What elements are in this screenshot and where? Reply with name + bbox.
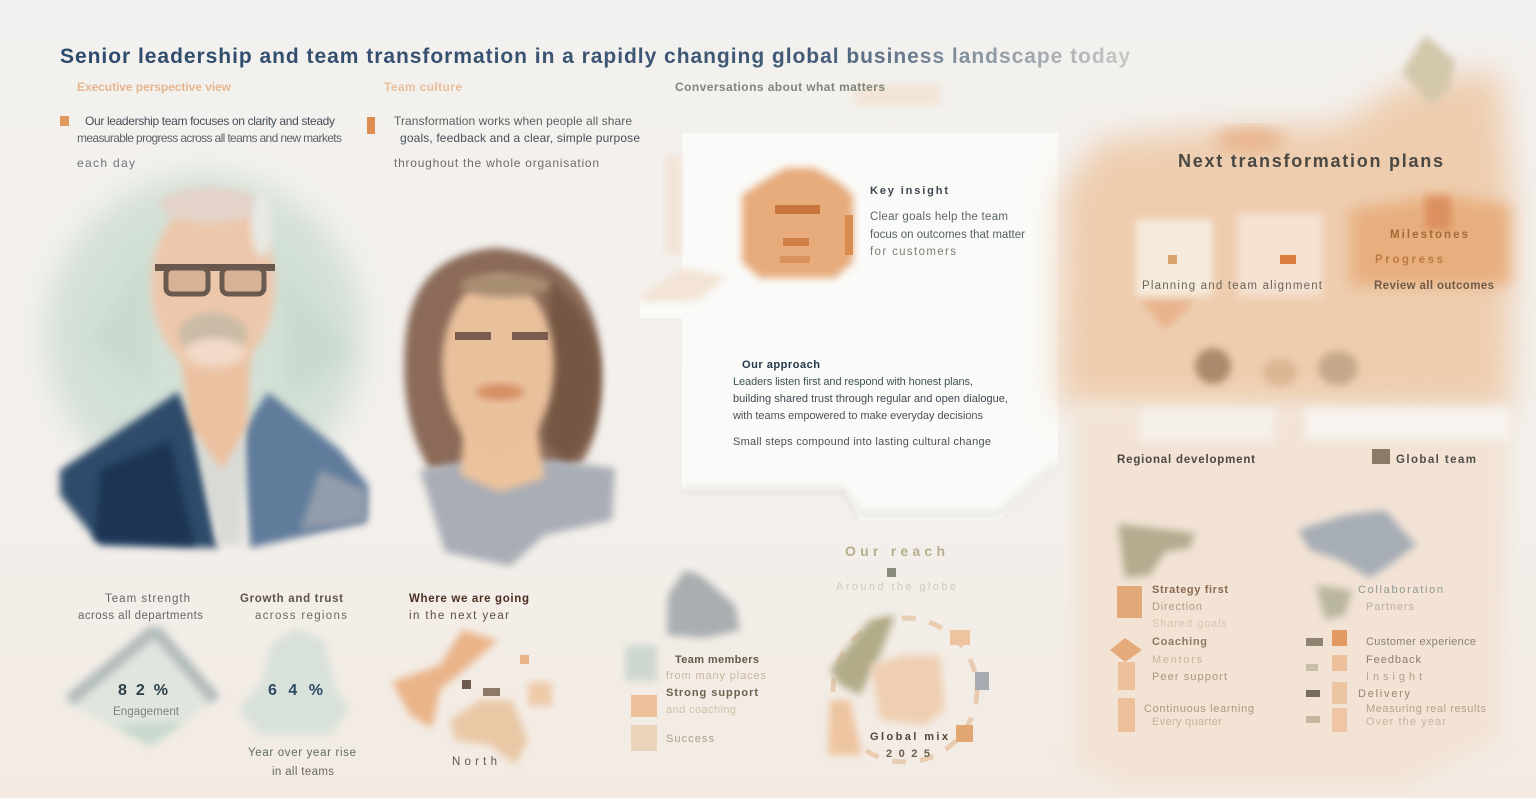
icon: green blob	[238, 628, 350, 735]
icon: gray people	[667, 570, 740, 638]
list: right: Insight	[1366, 671, 1422, 683]
text: cards: Planning and team alignment	[1142, 280, 1323, 292]
panel: bottom second metric: in all teams	[272, 766, 334, 778]
chart: ring	[828, 615, 989, 762]
list: left: Every quarter	[1152, 716, 1222, 728]
list: right: Measuring real results	[1366, 703, 1486, 715]
panel: bottom second metric: across regions	[255, 610, 347, 622]
panel: left intro text: measurable progress across all teams and new markets	[77, 131, 342, 145]
panel: bottom map metric: Where we are going	[409, 593, 529, 605]
icon: diamond	[62, 625, 220, 748]
title: Senior leadership and team transformation in a rapidly changing global business landscape today	[60, 45, 1130, 68]
text: bubble upper: focus on outcomes that matter	[870, 229, 1025, 241]
panel: bottom second metric: Year over year rise	[248, 747, 356, 759]
map: left region	[1118, 524, 1195, 578]
panel: bottom circle chart	[828, 543, 989, 762]
text: bubble lower: Small steps compound into lasting cultural change	[733, 436, 991, 448]
panel: bottom second metric: 64%	[268, 682, 323, 699]
text: bubble lower: with teams empowered to make everyday decisions	[732, 410, 984, 422]
panel: bottom people group: Team members	[675, 654, 759, 666]
list: right: Over the year	[1366, 716, 1446, 728]
panel: right orange watercolor	[1060, 35, 1512, 410]
panel: middle intro text: goals, feedback and a clear, simple purpose	[400, 131, 640, 145]
map: right region	[1298, 510, 1416, 578]
illustration: woman portrait	[404, 248, 615, 566]
list: left: Peer support	[1152, 671, 1227, 683]
text: bubble lower: Our approach	[742, 359, 820, 371]
text: lower headings: Regional development	[1117, 454, 1255, 466]
list: left: Mentors	[1152, 654, 1202, 666]
panel: bottom people group	[625, 570, 766, 751]
text: cards: Review all outcomes	[1374, 280, 1494, 292]
text: bubble lower: Leaders listen first and respond with honest plans,	[733, 376, 973, 388]
list: left	[1110, 584, 1254, 732]
list: right: Customer experience	[1366, 636, 1476, 648]
panel: bottom circle chart: Around the globe	[836, 581, 956, 593]
text: bubble lower	[732, 359, 1008, 448]
list: right: Feedback	[1366, 654, 1422, 666]
text: cards: Progress	[1375, 254, 1443, 266]
panel: bottom map metric: in the next year	[409, 610, 509, 622]
panel: right lower	[1075, 408, 1510, 790]
icon: orange document	[742, 168, 853, 278]
text: bubble upper: for customers	[870, 246, 956, 258]
list: left: Strategy first	[1152, 584, 1228, 596]
panel: bottom left triangle metric: Team strength	[105, 593, 190, 605]
text: lower headings	[1117, 449, 1476, 466]
list: right: Collaboration	[1358, 584, 1443, 596]
panel: bottom left triangle metric: 82%	[118, 682, 168, 699]
panel: left intro text: each day	[77, 156, 135, 170]
panel: bottom second metric: Growth and trust	[240, 593, 343, 605]
map: orange shapes	[392, 630, 552, 765]
list: left: Shared goals	[1152, 618, 1228, 630]
panel: middle intro text: throughout the whole organisation	[394, 156, 599, 170]
heading: bubble section	[675, 80, 940, 106]
panel: bottom map metric	[392, 593, 552, 768]
panel: middle intro text: Transformation works when people all share	[394, 114, 632, 128]
text: cards: Milestones	[1390, 229, 1468, 241]
list: left: Direction	[1152, 601, 1202, 613]
panel: bottom circle chart: Global mix	[870, 731, 949, 743]
card: second	[1238, 214, 1322, 296]
list: right: Partners	[1366, 601, 1414, 613]
list: left: Continuous learning	[1144, 703, 1254, 715]
panel: bottom people group: and coaching	[666, 704, 736, 716]
panel: bottom left triangle metric: across all departments	[78, 610, 203, 622]
text: bubble upper	[870, 185, 1025, 258]
text: bubble lower: building shared trust through regular and open dialogue,	[733, 393, 1008, 405]
panel: bottom people group: Strong support	[666, 687, 758, 699]
panel: bottom second metric	[238, 593, 356, 778]
list: left: Coaching	[1152, 636, 1207, 648]
heading: bubble section: Conversations about what matters	[675, 80, 885, 94]
illustration: man portrait	[47, 175, 368, 548]
text: bubble upper: Key insight	[870, 185, 948, 197]
panel: bottom left triangle metric	[62, 593, 220, 748]
icons: three small figures	[1195, 348, 1358, 386]
card: first	[1136, 220, 1212, 296]
panel: left intro text: Executive perspective view	[77, 80, 232, 94]
panel: middle intro text	[367, 80, 640, 170]
text: lower headings: Global team	[1396, 454, 1476, 466]
panel: left intro text: Our leadership team focuses on clarity and steady	[85, 114, 335, 128]
panel: bottom people group: from many places	[666, 670, 766, 682]
list: right	[1306, 584, 1486, 732]
panel: middle intro text: Team culture	[384, 80, 462, 94]
text: bubble upper: Clear goals help the team	[870, 211, 1008, 223]
panel: bottom people group: Success	[666, 733, 714, 745]
panel: bottom circle chart: 2025	[886, 748, 930, 760]
list: right: Delivery	[1358, 688, 1410, 700]
panel: bottom map metric: North	[452, 756, 497, 768]
heading: right panel: Next transformation plans	[1178, 151, 1443, 171]
panel: speech bubble	[640, 133, 1058, 520]
text: cards	[1142, 229, 1494, 292]
panel: left intro text	[60, 80, 342, 170]
panel: bottom circle chart: Our reach	[845, 543, 945, 559]
panel: bottom left triangle metric: Engagement	[113, 706, 180, 718]
